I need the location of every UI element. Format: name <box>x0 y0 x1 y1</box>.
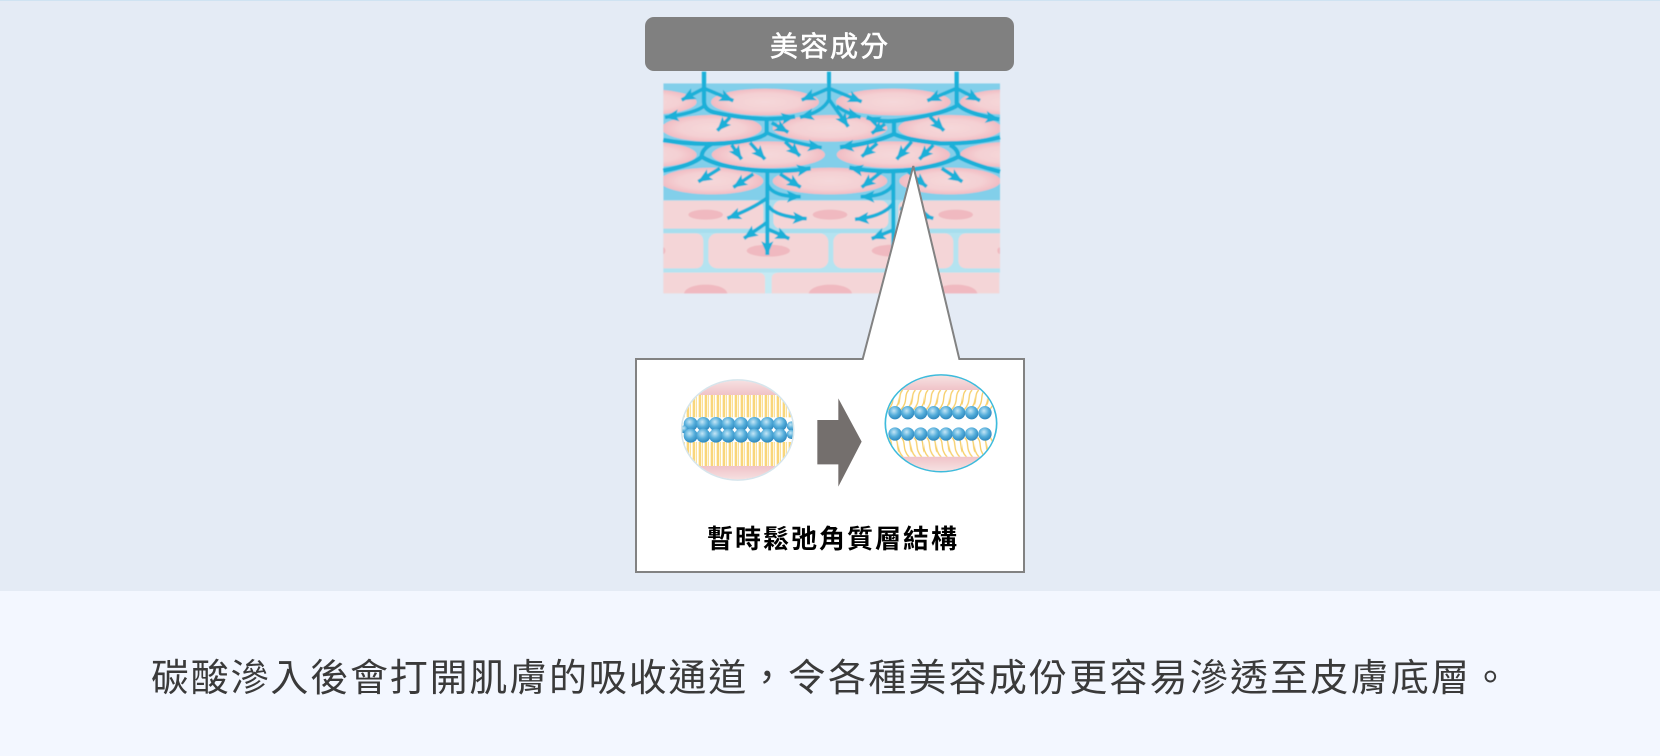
circle: loosened structure after <box>883 375 1000 472</box>
callout diagrams <box>680 375 1000 487</box>
penetration arrows: right branch <box>840 72 1000 251</box>
header bar: 美容成分: 美容成分 <box>770 31 890 62</box>
bottom description text: 碳酸滲入後會打開肌膚的吸收通道，令各種美容成份更容易滲透至皮膚底層。 <box>151 658 1511 700</box>
skin: lower cell rows <box>663 200 1000 293</box>
callout box with pointer <box>636 166 1024 572</box>
skin layer diagram <box>662 71 1002 294</box>
penetration arrows: left branch <box>663 72 822 255</box>
upper background panel <box>0 0 1660 591</box>
arrow: before to after <box>817 398 862 487</box>
callout caption: 暫時鬆弛角質層結構 <box>707 524 959 554</box>
penetration arrows: middle branch <box>800 72 862 127</box>
skin: stratum corneum band <box>662 82 1000 201</box>
circle: tight structure before <box>680 379 797 481</box>
header bar: 美容成分 <box>645 17 1014 71</box>
